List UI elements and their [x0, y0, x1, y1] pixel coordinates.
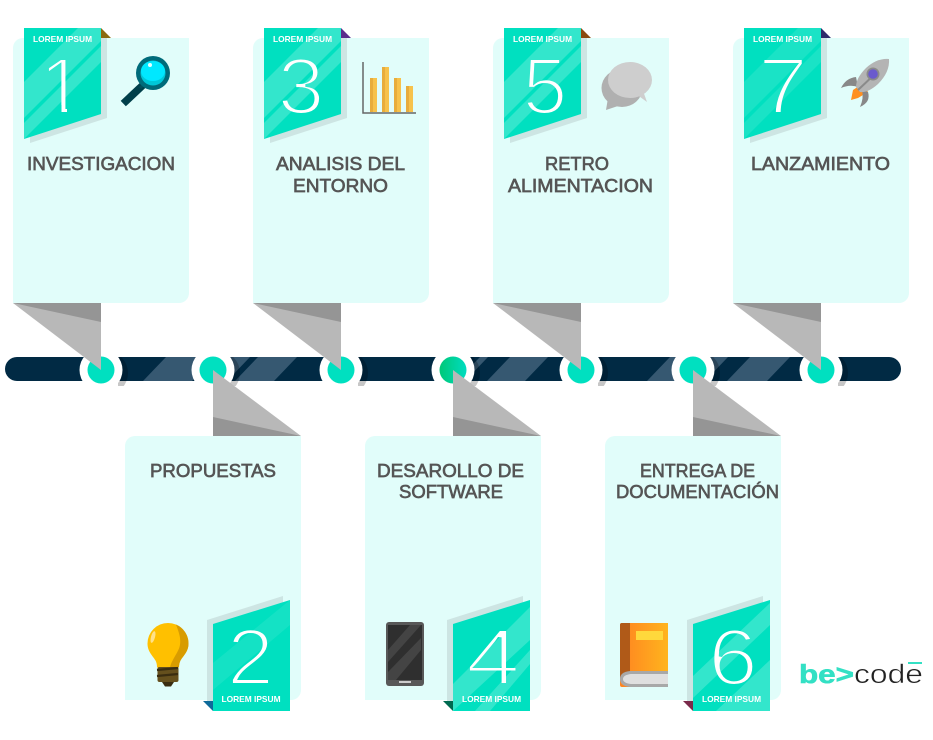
ribbon number 1: 1 [40, 42, 84, 130]
icon: bar chart [363, 62, 416, 113]
ribbon number 6: 6 [708, 612, 758, 701]
icon: smartphone [386, 622, 424, 686]
timeline node 3 [320, 356, 368, 386]
ribbon number 6: LOREM IPSUM [702, 694, 761, 704]
heading: retro alimentacion [508, 154, 653, 196]
ribbon number 2: LOREM IPSUM [221, 694, 281, 704]
ribbon number 7: LOREM IPSUM [753, 34, 812, 44]
ribbon number 2 [203, 596, 290, 711]
icon: magnifying glass [126, 56, 170, 101]
heading: entrega de documentacion [616, 461, 779, 502]
ribbon number 3 [264, 28, 351, 143]
panel: step 2 propuestas [125, 370, 301, 711]
ribbon number 4: LOREM IPSUM [462, 694, 521, 704]
panel: step 7 lanzamiento [733, 28, 909, 370]
heading: desarollo de software: SOFTWARE [399, 482, 503, 502]
connector pointer 4 [453, 370, 541, 436]
ribbon number 6 [683, 596, 770, 711]
icon: book [620, 623, 668, 687]
heading: analisis del entorno: ENTORNO [293, 176, 388, 196]
ribbon number 2: 2 [227, 613, 274, 702]
heading: investigacion: INVESTIGACION [27, 154, 175, 174]
panel: step 5 retro alimentacion [493, 28, 669, 370]
heading: entrega de documentacion: ENTREGA DE [640, 461, 755, 481]
timeline node 2 [192, 356, 240, 386]
timeline node 5 [560, 356, 608, 386]
connector pointer 7 [733, 303, 821, 370]
ribbon number 4 [443, 596, 530, 711]
panel: step 3 analisis del entorno [253, 28, 429, 370]
heading: entrega de documentacion: DOCUMENTACIÓN [616, 481, 779, 502]
heading: analisis del entorno [276, 154, 405, 196]
heading: analisis del entorno: ANALISIS DEL [276, 154, 405, 174]
timeline node 7 [800, 356, 848, 386]
heading: lanzamiento: LANZAMIENTO [751, 154, 890, 174]
ribbon number 3: LOREM IPSUM [273, 34, 332, 44]
connector pointer 5 [493, 303, 581, 370]
ribbon number 7 [744, 28, 831, 143]
connector pointer 2 [213, 370, 301, 436]
connector pointer 1 [13, 303, 101, 370]
panel: step 6 entrega de documentacion [605, 370, 781, 711]
heading: retro alimentacion: RETRO [545, 154, 609, 174]
ribbon number 1: LOREM IPSUM [33, 34, 92, 44]
panel: step 4 desarollo de software [365, 370, 541, 711]
ribbon number 7: 7 [758, 41, 808, 130]
connector pointer 6 [693, 370, 781, 436]
logo: be>code: be> [799, 659, 854, 689]
panel: step 1 investigacion [13, 28, 189, 370]
ribbon number 5: LOREM IPSUM [513, 34, 572, 44]
logo: be>code: code [854, 659, 923, 689]
icon: speech bubbles [602, 62, 652, 110]
timeline node 4 [432, 356, 480, 386]
ribbon number 5: 5 [523, 42, 567, 130]
ribbon number 4: 4 [466, 612, 520, 702]
heading: propuestas: PROPUESTAS [150, 461, 276, 481]
heading: desarollo de software: DESAROLLO DE [377, 461, 524, 481]
connector pointer 3 [253, 303, 341, 370]
ribbon number 3: 3 [278, 42, 324, 131]
icon: rocket [841, 59, 889, 107]
timeline bar [5, 357, 901, 381]
ribbon number 5 [504, 28, 591, 143]
icon: light bulb [148, 623, 189, 686]
timeline node 6 [672, 356, 720, 386]
heading: desarollo de software [377, 461, 524, 502]
ribbon number 1 [24, 28, 111, 143]
heading: retro alimentacion: ALIMENTACION [508, 176, 653, 196]
timeline node 1 [80, 356, 128, 386]
logo: be>code [799, 659, 923, 689]
